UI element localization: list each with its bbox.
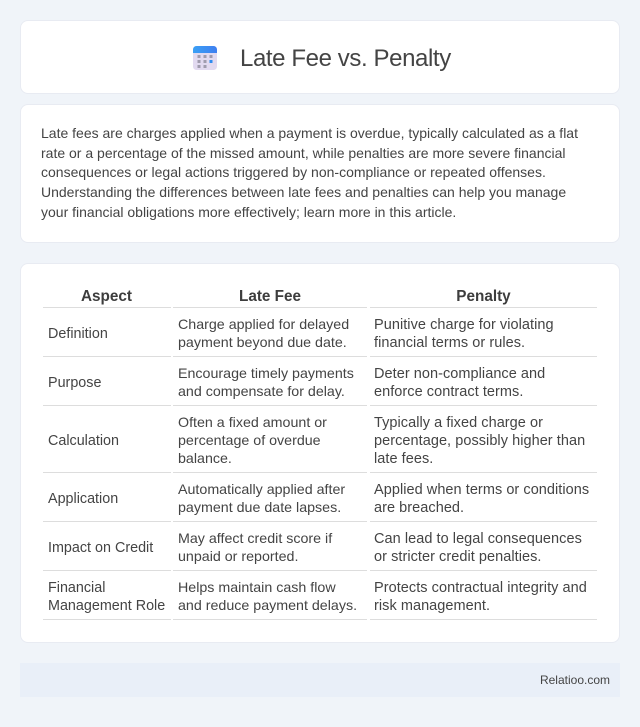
row: calculation: Calculation <box>48 433 119 449</box>
title: Late Fee vs. Penalty <box>240 45 451 72</box>
intro text <box>41 125 578 220</box>
row: financial management role: and reduce payment delays. <box>178 598 357 614</box>
panel: introduction <box>20 104 620 243</box>
row: financial management role: Helps maintain cash flow <box>178 580 336 596</box>
row: application: are breached. <box>374 500 464 516</box>
table header: Aspect <box>81 288 132 305</box>
row: application: payment due date lapses. <box>178 500 341 516</box>
table header: Late Fee <box>239 288 301 305</box>
row: financial management role <box>48 580 587 614</box>
row: purpose: Purpose <box>48 375 101 391</box>
row: purpose: Encourage timely payments <box>178 366 354 382</box>
intro text: consequences or legal actions triggered by non-compliance or repeated offenses. <box>41 164 546 180</box>
row: definition: Charge applied for delayed <box>178 317 349 333</box>
row: calculation: percentage of overdue <box>178 433 321 449</box>
footer <box>20 663 620 697</box>
row: application <box>48 482 589 516</box>
footer credit: Relatioo.com <box>540 673 610 687</box>
row: application: Applied when terms or conditions <box>374 482 589 498</box>
row: calculation: Typically a fixed charge or <box>374 415 543 431</box>
row: purpose: enforce contract terms. <box>374 384 523 400</box>
row: calculation: percentage, possibly higher than <box>374 433 585 449</box>
row: application: Application <box>48 491 118 507</box>
row: impact on credit <box>48 531 582 565</box>
icon: calendar <box>193 46 217 70</box>
row: financial management role: risk management. <box>374 598 490 614</box>
row: calculation <box>48 415 585 467</box>
row: impact on credit: or stricter credit penalties. <box>374 549 541 565</box>
row: impact on credit: May affect credit score if <box>178 531 332 547</box>
table header <box>81 288 511 305</box>
row: calculation: balance. <box>178 451 232 467</box>
row: impact on credit: Can lead to legal consequences <box>374 531 582 547</box>
intro text: rate or a percentage of the missed amount, while penalties are more severe financial <box>41 145 566 161</box>
row: definition: payment beyond due date. <box>178 335 347 351</box>
table header: Penalty <box>456 288 511 305</box>
row: financial management role: Financial <box>48 580 105 596</box>
intro text: Understanding the differences between late fees and penalties can help you manage <box>41 184 566 200</box>
row: purpose: and compensate for delay. <box>178 384 345 400</box>
row: financial management role: Management Role <box>48 598 165 614</box>
panel: comparison table <box>20 263 620 643</box>
row: financial management role: Protects contractual integrity and <box>374 580 587 596</box>
header panel <box>20 20 620 94</box>
row: definition: Definition <box>48 326 108 342</box>
row: definition: financial terms or rules. <box>374 335 525 351</box>
row: purpose <box>48 366 545 400</box>
row: purpose: Deter non-compliance and <box>374 366 545 382</box>
intro text: Late fees are charges applied when a payment is overdue, typically calculated as a flat <box>41 125 578 141</box>
row: calculation: Often a fixed amount or <box>178 415 327 431</box>
row: impact on credit: Impact on Credit <box>48 540 153 556</box>
table rules <box>43 307 597 620</box>
row: definition <box>48 317 554 351</box>
row: definition: Punitive charge for violating <box>374 317 554 333</box>
row: application: Automatically applied after <box>178 482 345 498</box>
intro text: your financial obligations more effectively; learn more in this article. <box>41 204 456 220</box>
row: impact on credit: unpaid or reported. <box>178 549 298 565</box>
row: calculation: late fees. <box>374 451 433 467</box>
